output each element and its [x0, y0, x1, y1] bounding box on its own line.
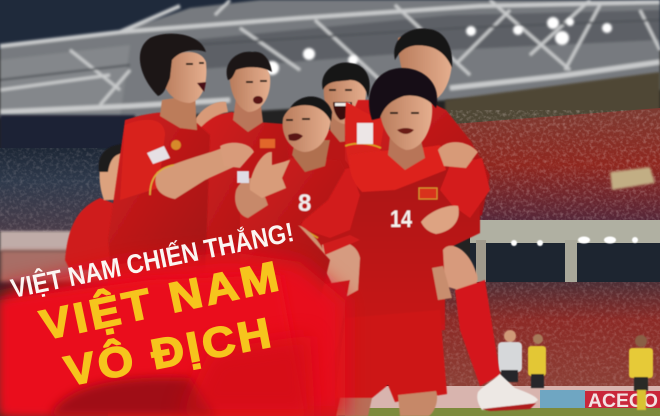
sock of carried player: [305, 280, 350, 395]
jersey: [240, 158, 345, 300]
stadium lights: [265, 17, 612, 75]
hand on leg: [421, 206, 459, 234]
headline: white tagline: VIỆT NAM CHIẾN THẮNG!: [8, 216, 296, 304]
background: lower crowd: [430, 282, 660, 392]
background: stand concrete and dark underside: [0, 220, 660, 290]
shorts: [335, 310, 447, 402]
background: stadium roof: [0, 0, 660, 118]
arm: [235, 178, 268, 218]
neck: [388, 135, 425, 170]
patch: [147, 146, 170, 164]
face: [230, 62, 270, 112]
crest: [171, 140, 181, 150]
hair: [227, 52, 272, 80]
background: upper crowd right: [440, 108, 660, 222]
flag badge: [419, 188, 437, 199]
headline: VIỆT NAM: VIỆT NAM: [36, 252, 283, 349]
number 8: 8: [298, 190, 311, 217]
sleeve trim: [345, 144, 381, 148]
eyes: [186, 63, 204, 64]
hand on shoulder: [438, 142, 478, 168]
mouth: [253, 96, 263, 104]
player: number 14: [296, 68, 538, 416]
background: advertising boards and pitch: ACECO: [588, 391, 658, 412]
player: second row, mouth open: [196, 51, 284, 200]
face: [282, 102, 331, 152]
thigh of carried player: [322, 241, 360, 300]
background: advertising boards and pitch: [345, 386, 660, 416]
jersey: [108, 112, 210, 280]
player: left big, in front: [108, 34, 254, 280]
player: top, on shoulders: [345, 29, 490, 230]
face: [163, 52, 206, 103]
neck: [160, 95, 197, 130]
number 14: 14: [390, 206, 413, 233]
sock: [455, 280, 500, 386]
eyes: [286, 119, 310, 120]
player: far left: [65, 144, 124, 270]
eyes: [329, 89, 352, 91]
background: dark under-roof right: [445, 72, 660, 125]
background: dark under-roof left: [0, 115, 135, 150]
background: upper crowd left: [0, 148, 114, 232]
arm: [156, 148, 236, 199]
boot: [477, 374, 538, 410]
jersey: [308, 166, 481, 331]
sleeve trim: [150, 165, 174, 195]
player: screaming, behind: [322, 63, 370, 175]
leg skin: [398, 391, 437, 416]
eyes: [390, 112, 419, 114]
hair: [290, 96, 332, 122]
smile: [397, 128, 414, 134]
patch: [357, 123, 373, 144]
jersey: [200, 112, 284, 200]
face: [380, 92, 432, 150]
knee: [443, 246, 478, 290]
hand under knee: [432, 266, 452, 300]
background: referee and rival players: [498, 330, 653, 410]
forearm sleeve: [350, 145, 446, 192]
hair: [140, 34, 206, 96]
neck: [292, 140, 330, 172]
headline: VÔ ĐỊCH: VÔ ĐỊCH: [60, 308, 274, 395]
eyes: [246, 81, 267, 82]
neck: [233, 98, 263, 132]
flag badge: [260, 139, 275, 148]
sleeve patch: [237, 171, 249, 183]
team body mass behind players: [108, 125, 350, 416]
red gradient overlay: [0, 252, 345, 416]
hair: [369, 68, 437, 120]
smile: [288, 133, 303, 141]
mouth: [197, 82, 206, 92]
raised hand: [250, 152, 290, 198]
background: night sky: [0, 0, 660, 50]
arm raised: [191, 102, 228, 128]
mouth: [333, 102, 352, 120]
player: captain number 8: [235, 96, 345, 300]
sleeve: [344, 102, 384, 165]
hand: [220, 143, 254, 168]
